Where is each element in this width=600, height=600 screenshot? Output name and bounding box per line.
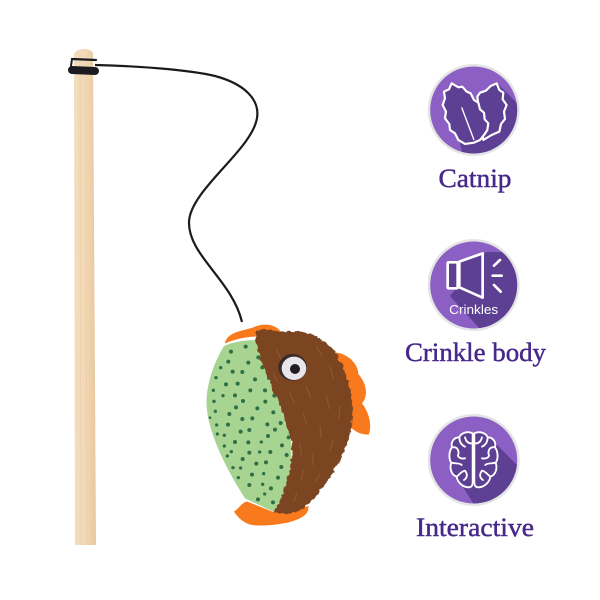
badge: catnip [428, 64, 520, 193]
badge disc [430, 242, 517, 328]
plush fish toy [207, 325, 370, 526]
badge disc [430, 66, 517, 154]
green belly [207, 340, 292, 512]
belly dots [209, 345, 291, 504]
badge: crinkles [405, 239, 546, 370]
icon: brain [449, 432, 498, 487]
string binding on stick [71, 59, 96, 71]
wooden stick [74, 49, 96, 545]
icon: mint leaves [443, 83, 507, 144]
label: Catnip: Catnip [438, 164, 512, 193]
fish eye [278, 354, 307, 381]
badge: interactive [416, 414, 540, 542]
badge ring [428, 414, 520, 506]
badge disc [430, 416, 517, 504]
long shadow [463, 436, 517, 504]
fish tail and top orange fin [225, 325, 370, 526]
badge text: Crinkles: Crinkles [449, 302, 499, 317]
long shadow [450, 252, 518, 328]
brown fur body [255, 330, 353, 514]
fur texture strands [273, 347, 340, 501]
label: Crinkle body: Crinkle body [405, 338, 546, 367]
badge ring [428, 64, 520, 156]
long shadow [460, 82, 518, 154]
string [95, 65, 257, 322]
infographic canvas [68, 49, 546, 545]
icon: speaker [448, 253, 502, 298]
label: Interactive: Interactive [416, 513, 534, 542]
badge ring [428, 239, 520, 331]
